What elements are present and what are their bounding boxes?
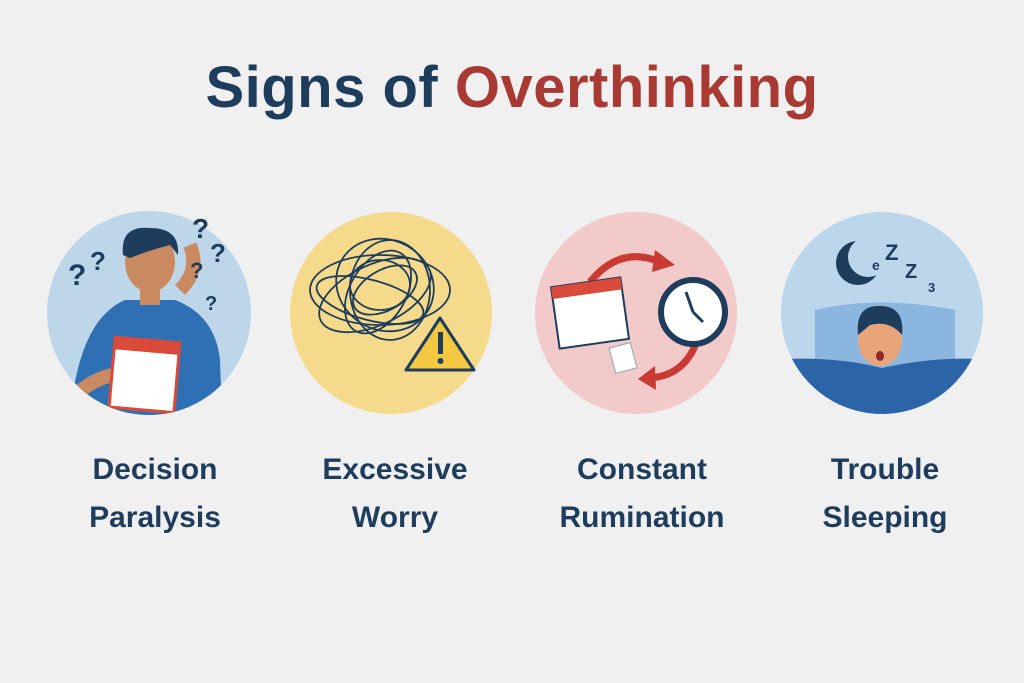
icon: decision paralysis: ? — [210, 238, 226, 268]
label: trouble sleeping: Trouble — [831, 453, 939, 486]
label: trouble sleeping: Sleeping — [822, 501, 948, 534]
icon: decision paralysis: ? — [68, 259, 86, 292]
icon: trouble sleeping: Z — [885, 240, 898, 265]
icon: decision paralysis: ? — [90, 246, 106, 276]
icon: trouble sleeping — [781, 212, 983, 414]
label: decision paralysis: Decision — [92, 453, 218, 486]
icon: rumination — [535, 212, 737, 414]
label: excessive worry: Worry — [352, 501, 438, 534]
label: excessive worry: Excessive — [322, 453, 468, 486]
icon: trouble sleeping: Z — [905, 261, 917, 283]
icon: excessive worry — [290, 212, 492, 414]
icon: decision paralysis: ? — [190, 258, 203, 283]
icon: trouble sleeping: 3 — [928, 280, 935, 295]
label: decision paralysis: Paralysis — [89, 501, 221, 534]
label: trouble sleeping — [822, 453, 948, 534]
label: constant rumination: Constant — [577, 453, 707, 486]
icon: decision paralysis: ? — [192, 213, 209, 244]
icon: trouble sleeping: e — [872, 257, 880, 273]
icon: decision paralysis: ? — [205, 293, 217, 315]
label: constant rumination — [560, 453, 724, 534]
icon: decision paralysis — [47, 211, 251, 420]
title: Signs of Overthinking — [205, 55, 819, 120]
label: excessive worry — [322, 453, 468, 534]
label: constant rumination: Rumination — [560, 501, 724, 534]
label: decision paralysis — [89, 453, 221, 534]
icons row — [47, 211, 983, 415]
